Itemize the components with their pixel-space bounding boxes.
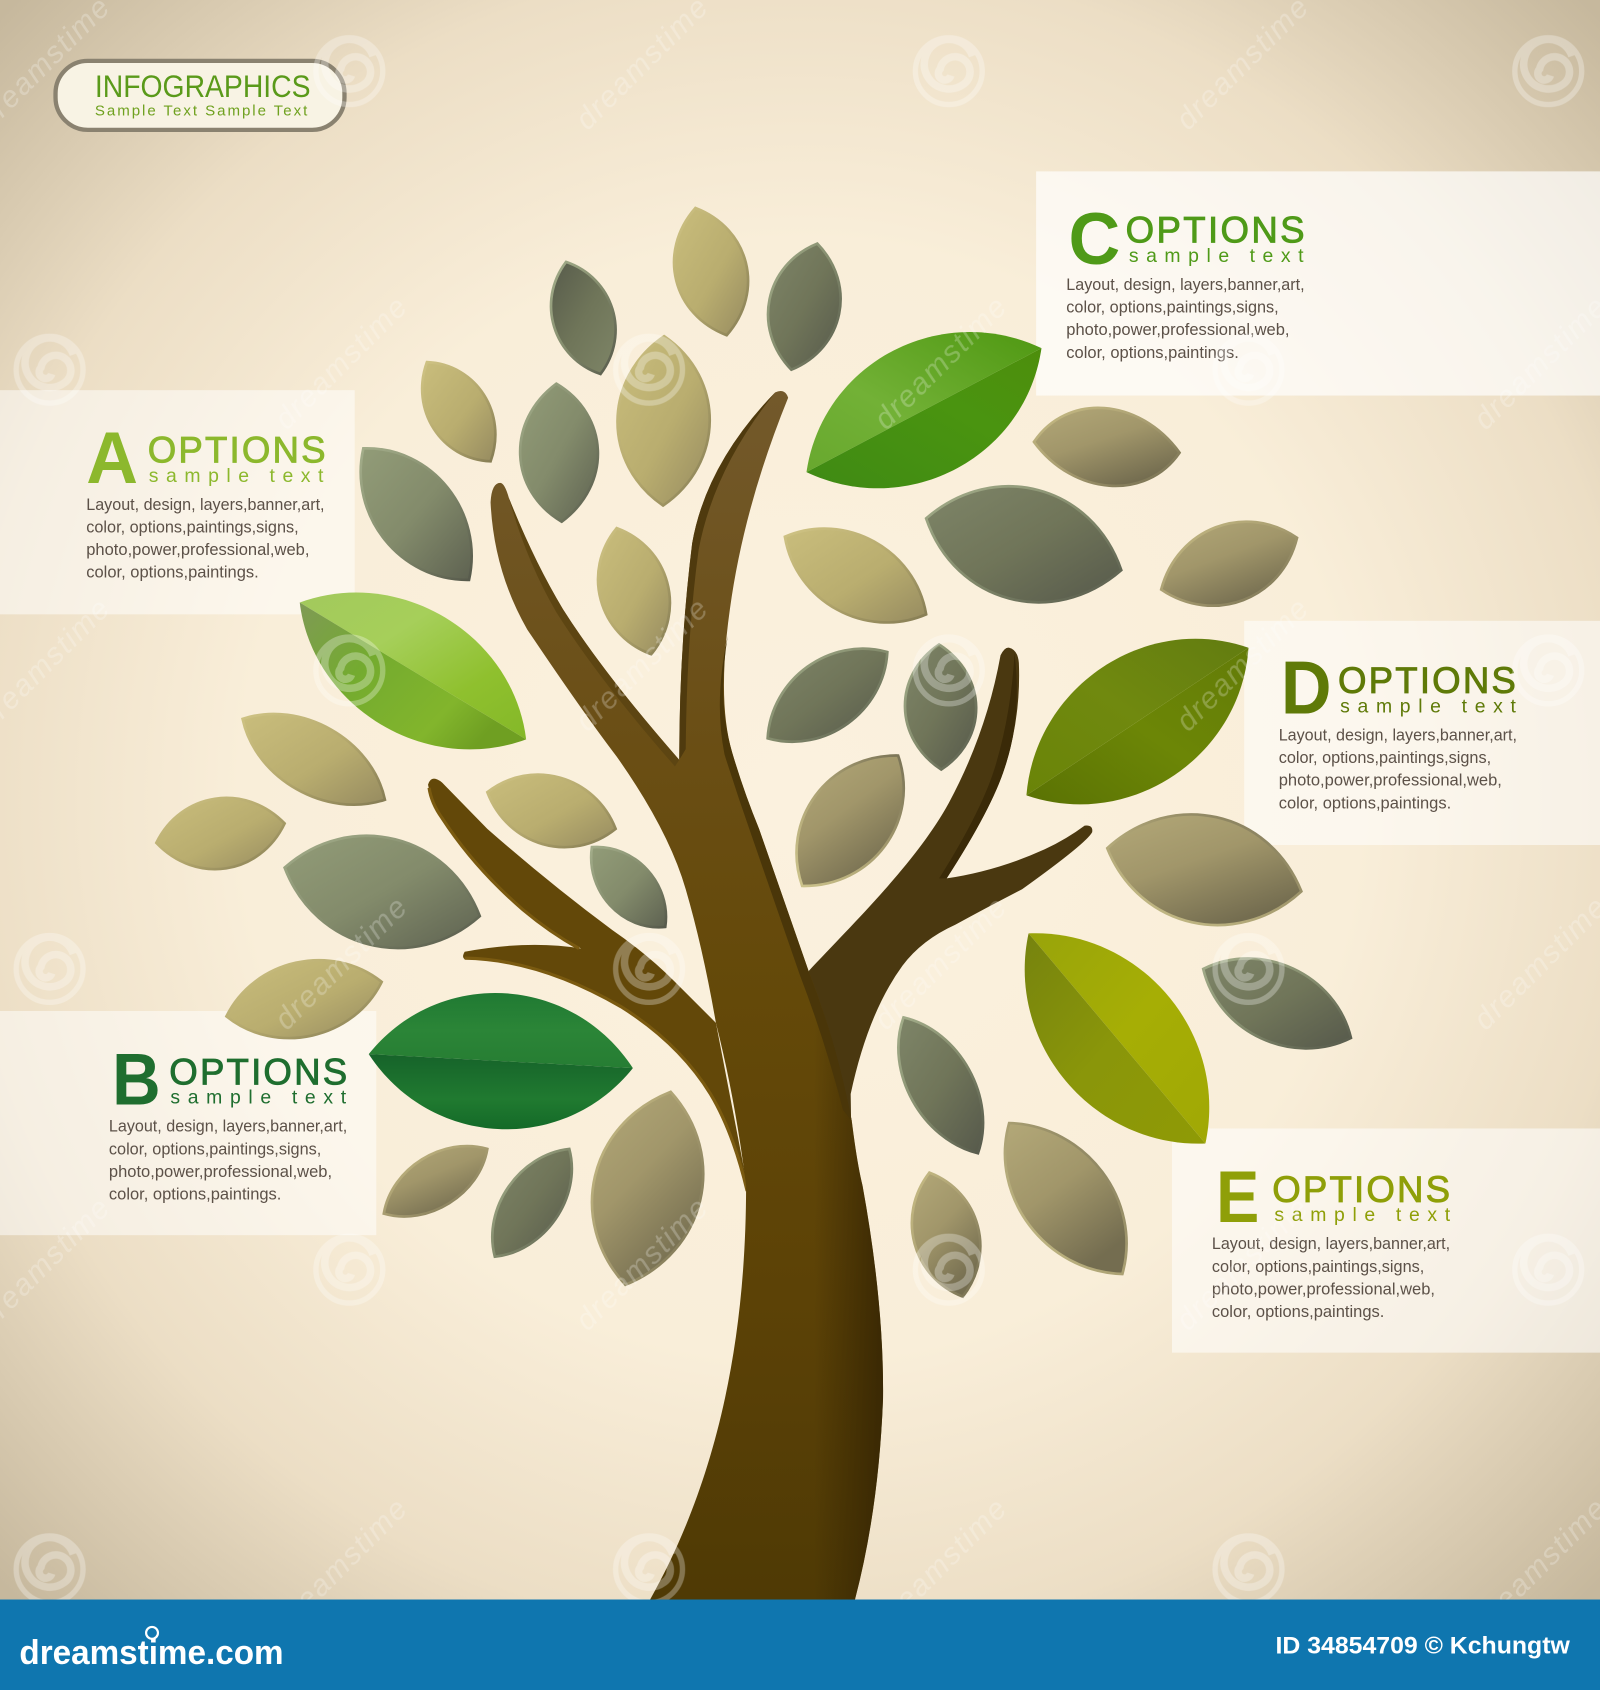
option E text: E <box>1216 1156 1259 1238</box>
option A text: OPTIONS <box>148 429 326 470</box>
watermark text: dreamstime <box>868 891 1013 1036</box>
right branch <box>809 648 1092 1164</box>
leaves <box>156 208 1351 1297</box>
leaf 12 <box>487 775 616 847</box>
watermark text: dreamstime <box>868 1493 1013 1638</box>
right branch shadow <box>939 653 1017 878</box>
option B text <box>109 1039 347 1204</box>
watermark text: dreamstime <box>268 891 414 1036</box>
footer logo: dreamstime.com <box>19 1634 284 1672</box>
leaf 15 <box>384 1146 487 1216</box>
option C text: color, options,paintings. <box>1066 344 1239 362</box>
panel: option B background <box>0 1011 376 1235</box>
green leaf B <box>369 993 633 1129</box>
option D text: Layout, design, layers,banner,art, <box>1279 726 1517 744</box>
option B text: color, options,paintings,signs, <box>109 1140 321 1158</box>
leaf 16 <box>492 1149 572 1257</box>
option A text: photo,power,professional,web, <box>86 541 309 559</box>
leaf 29 <box>912 1173 980 1297</box>
leaf 10 <box>156 798 285 869</box>
left branch shadow <box>509 498 679 766</box>
option B text: photo,power,professional,web, <box>109 1163 332 1181</box>
title text: INFOGRAPHICS <box>95 69 311 104</box>
option E text <box>1212 1156 1451 1321</box>
leaf 5 <box>422 362 495 461</box>
green leaf A <box>300 592 526 749</box>
option D text: photo,power,professional,web, <box>1279 772 1502 790</box>
leaf 4 <box>618 336 710 505</box>
option C text: OPTIONS <box>1126 210 1305 251</box>
leaf 17 <box>592 1092 703 1285</box>
trunk shading <box>814 986 883 1599</box>
option C text: photo,power,professional,web, <box>1066 321 1289 339</box>
leaf 26 <box>1203 959 1351 1048</box>
leaf 28 <box>1005 1123 1127 1274</box>
option E text: OPTIONS <box>1272 1169 1450 1210</box>
green leaf C <box>806 332 1042 488</box>
leaf 23 <box>905 645 976 770</box>
option E text: Layout, design, layers,banner,art, <box>1212 1235 1450 1253</box>
option E text: color, options,paintings. <box>1212 1303 1384 1321</box>
title subtitle: Sample Text Sample Text <box>95 102 308 119</box>
panel: option D background <box>1244 621 1600 845</box>
watermark text: dreamstime <box>569 1192 715 1337</box>
option B text: OPTIONS <box>169 1051 347 1092</box>
watermark text: dreamstime <box>1170 593 1315 738</box>
option B text: Layout, design, layers,banner,art, <box>109 1118 347 1136</box>
option B text: color, options,paintings. <box>109 1186 281 1204</box>
watermark text: dreamstime <box>569 593 715 738</box>
watermark text: dreamstime <box>268 1493 414 1638</box>
option E text: color, options,paintings,signs, <box>1212 1258 1424 1276</box>
leaf 21 <box>1161 522 1297 606</box>
leaf 1 <box>674 208 748 335</box>
option D text: OPTIONS <box>1338 660 1516 701</box>
option D text: sample text <box>1340 695 1517 717</box>
title badge <box>56 61 344 130</box>
tree trunk and branches <box>428 391 1092 1599</box>
leaf 2 <box>768 244 841 370</box>
leaf 14 <box>226 960 382 1038</box>
leaf 6 <box>520 384 598 522</box>
leaf 3 <box>551 262 616 374</box>
footer image id: ID 34854709 © Kchungtw <box>1275 1633 1570 1659</box>
option C text: C <box>1068 198 1120 280</box>
panel: option A background <box>0 390 355 614</box>
green leaf D <box>1026 639 1249 804</box>
leaf 24 <box>797 756 904 886</box>
panel: option C background <box>1036 171 1600 396</box>
watermark text: dreamstime <box>868 291 1013 436</box>
option C text: color, options,paintings,signs, <box>1066 299 1279 317</box>
watermark text: dreamstime <box>1170 1192 1315 1337</box>
footer bar <box>0 1599 1600 1690</box>
option C text <box>1066 198 1305 362</box>
leaf 11 <box>285 836 480 948</box>
trunk right side shadow <box>720 636 852 1121</box>
leaf 22 <box>768 649 887 742</box>
leaf 25 <box>1107 814 1301 925</box>
leaf 13 <box>591 847 666 927</box>
option E text: photo,power,professional,web, <box>1212 1280 1435 1298</box>
leaf 8 <box>598 528 670 654</box>
footer logo spiral <box>146 1627 158 1639</box>
leaf 19 <box>926 486 1121 602</box>
option D text: color, options,paintings,signs, <box>1279 749 1491 767</box>
watermark text: dreamstime <box>268 291 414 436</box>
option A text <box>86 417 326 582</box>
option D text: D <box>1281 646 1332 730</box>
option A text: Layout, design, layers,banner,art, <box>86 496 325 514</box>
option A text: color, options,paintings,signs, <box>86 518 299 536</box>
main trunk <box>491 391 883 1599</box>
option C text: sample text <box>1129 245 1304 267</box>
option A text: A <box>86 417 138 499</box>
upper branch shadow <box>679 392 775 760</box>
option B text: sample text <box>170 1087 347 1109</box>
option A text: sample text <box>149 465 324 487</box>
leaf 18 <box>1034 408 1180 486</box>
leaf 27 <box>898 1017 983 1153</box>
option C text: Layout, design, layers,banner,art, <box>1066 276 1305 294</box>
lower left branch rim <box>429 788 747 1191</box>
option E text: sample text <box>1274 1204 1451 1226</box>
olive leaf E <box>1025 933 1209 1144</box>
leaf 7 <box>361 448 472 580</box>
lower left branch <box>428 779 749 1196</box>
option A text: color, options,paintings. <box>86 564 259 582</box>
option D text: color, options,paintings. <box>1279 794 1451 812</box>
leaf 20 <box>785 529 926 622</box>
option B text: B <box>112 1039 161 1121</box>
leaf 9 <box>243 714 385 805</box>
option D text <box>1279 646 1517 812</box>
panel: option E background <box>1172 1128 1600 1353</box>
